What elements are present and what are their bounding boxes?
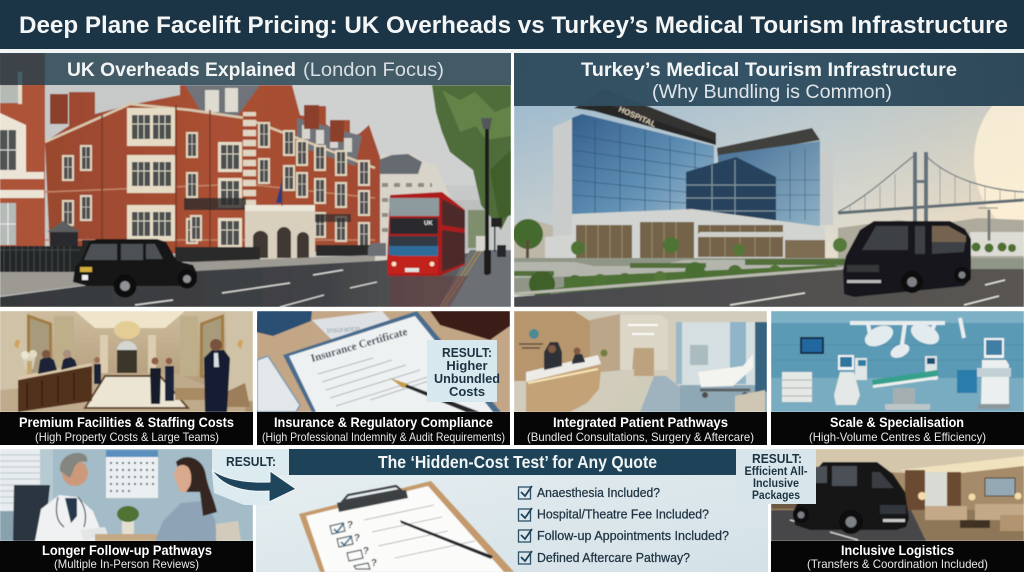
caption: inclusive logistics: (Transfers & Coordination Included) [807, 557, 988, 571]
railing [0, 246, 82, 273]
car and van [368, 243, 386, 256]
black van [843, 221, 971, 297]
bed room [680, 322, 767, 412]
callout: result arrow into the hidden-cost test: RESULT: [226, 455, 276, 469]
panel: inclusive logistics [771, 449, 1024, 572]
trees and shrubs [513, 219, 543, 249]
illustration: insurance certificate on desk: Insurance [327, 324, 360, 335]
plant [122, 519, 134, 535]
callout: result efficient all-inclusive packages: RESULT: [752, 451, 802, 466]
check item: follow-up: Follow-up Appointments Included? [537, 529, 729, 543]
panel: integrated patient pathways [514, 311, 767, 445]
lamp post [978, 208, 998, 240]
caption: premium facilities: (High Property Costs & Large Teams) [35, 430, 219, 444]
check item: anaesthesia: Anaesthesia Included? [537, 486, 660, 500]
heading: UK overheads: UK Overheads Explained [67, 59, 296, 81]
quoin column [243, 112, 256, 207]
certificate text: Insurance Certificate [310, 326, 409, 365]
main title: Deep Plane Facelift Pricing: UK Overheads vs Turkey’s Medical Tourism Infrastructure [19, 12, 1008, 39]
caption: longer follow-up pathways: (Multiple In-Person Reviews) [54, 557, 199, 571]
caption: insurance and compliance [257, 412, 510, 445]
caption: scale and specialisation: (High-Volume Centres & Efficiency) [809, 430, 986, 444]
heading: UK overheads [0, 53, 511, 85]
chair right [216, 521, 241, 541]
illustration: doctor consulting a patient [0, 449, 253, 541]
lamp post [485, 125, 489, 275]
tree [432, 85, 511, 230]
illustration: clipboard with checklist and pen [299, 481, 514, 572]
heading: Turkey infrastructure [514, 53, 1024, 106]
illustration: clipboard with checklist and pen: ? [354, 533, 360, 544]
calendar [106, 450, 158, 498]
chair [13, 485, 50, 541]
caption: premium facilities [0, 412, 253, 445]
roof band [574, 89, 716, 145]
distant buildings [374, 153, 450, 266]
hospital main tower [553, 119, 572, 239]
callout: result arrow into the hidden-cost test [212, 449, 296, 505]
heading: Turkey infrastructure: (Why Bundling is Common) [652, 81, 892, 103]
van [793, 462, 909, 530]
title bar [0, 0, 1024, 53]
patient [155, 501, 217, 542]
caption: insurance and compliance: Insurance & Regulatory Compliance [274, 414, 493, 430]
illustration: hotel-like lobby [0, 311, 253, 412]
panel: longer follow-up pathways [0, 449, 253, 572]
portico [245, 205, 315, 259]
illustration: black van outside a hotel-style lounge [771, 449, 1024, 541]
caption: insurance and compliance: (High Professional Indemnity & Audit Requirements) [262, 430, 505, 444]
water and hills [838, 218, 1024, 260]
callout: result higher unbundled costs: Unbundled [434, 371, 500, 386]
callout: result higher unbundled costs: Higher [446, 358, 488, 373]
panel: UK overheads hero [0, 53, 511, 307]
panel: premium facilities [0, 311, 253, 445]
heading: UK overheads: (London Focus) [303, 59, 444, 81]
black taxi [73, 239, 197, 286]
upper windows [127, 108, 175, 146]
hospital label: HOSPITAL [617, 105, 657, 129]
desk [95, 534, 160, 541]
caption: inclusive logistics [771, 541, 1024, 572]
illustration: operating theatre [771, 311, 1024, 412]
caption: integrated patient pathways: (Bundled Consultations, Surgery & Aftercare) [527, 430, 754, 444]
balcony [184, 198, 246, 210]
ground [514, 258, 1024, 295]
wet reflection [390, 276, 468, 307]
illustration: London street with brick building, taxi and red bus [0, 53, 511, 307]
panel: hidden-cost test [256, 449, 768, 572]
road [0, 253, 470, 307]
heading: Turkey infrastructure: Turkey’s Medical Tourism Infrastructure [581, 59, 957, 81]
arrow [212, 470, 296, 502]
panel: Turkey infrastructure hero [513, 53, 1024, 307]
callout: result efficient all-inclusive packages: Packages [752, 490, 800, 502]
pavement [0, 255, 375, 296]
caption: longer follow-up pathways: Longer Follow-up Pathways [42, 542, 212, 558]
main brick building [45, 85, 380, 255]
bridge [838, 155, 1024, 213]
illustration: clipboard with checklist and pen: ? [347, 520, 353, 531]
check item: hospital fee: Hospital/Theatre Fee Included? [537, 508, 709, 522]
illustration: reception, corridor and patient room [514, 311, 767, 412]
caption: longer follow-up pathways [0, 541, 253, 572]
caption: integrated patient pathways: Integrated Patient Pathways [553, 414, 728, 430]
illustration: hospital, Bosphorus bridge and black van [514, 105, 1024, 307]
red bus [387, 192, 465, 276]
left building [0, 53, 45, 278]
reception desk [526, 363, 601, 412]
callout: result efficient all-inclusive packages [736, 449, 816, 504]
callout: result efficient all-inclusive packages: Efficient All- [744, 466, 808, 478]
caption: scale and specialisation [771, 412, 1024, 445]
checklist [518, 486, 729, 565]
panel: scale and specialisation [771, 311, 1024, 445]
check item: aftercare: Defined Aftercare Pathway? [537, 551, 690, 565]
caption: scale and specialisation: Scale & Specialisation [830, 414, 964, 430]
illustration: London street with brick building, taxi and red bus: UK [424, 221, 433, 227]
callout: result efficient all-inclusive packages: Inclusive [753, 478, 799, 490]
illustration: clipboard with checklist and pen: ? [371, 558, 377, 569]
callout: result higher unbundled costs: Costs [449, 384, 485, 399]
callout: result higher unbundled costs [427, 340, 500, 402]
gazebo [47, 221, 80, 232]
caption: integrated patient pathways [514, 412, 767, 445]
heading: hidden-cost test [289, 449, 737, 475]
podium [545, 209, 825, 259]
illustration: clipboard with checklist and pen: ? [363, 546, 369, 557]
caption: premium facilities: Premium Facilities & Staffing Costs [19, 414, 234, 430]
caption: inclusive logistics: Inclusive Logistics [841, 542, 954, 558]
panel: insurance and compliance [256, 311, 510, 445]
second tower [717, 128, 820, 158]
callout: result higher unbundled costs: RESULT: [442, 345, 492, 360]
heading: hidden-cost test: The ‘Hidden-Cost Test’ for Any Quote [378, 452, 657, 472]
illustration: insurance certificate on desk [257, 311, 510, 412]
doctor [35, 495, 105, 541]
